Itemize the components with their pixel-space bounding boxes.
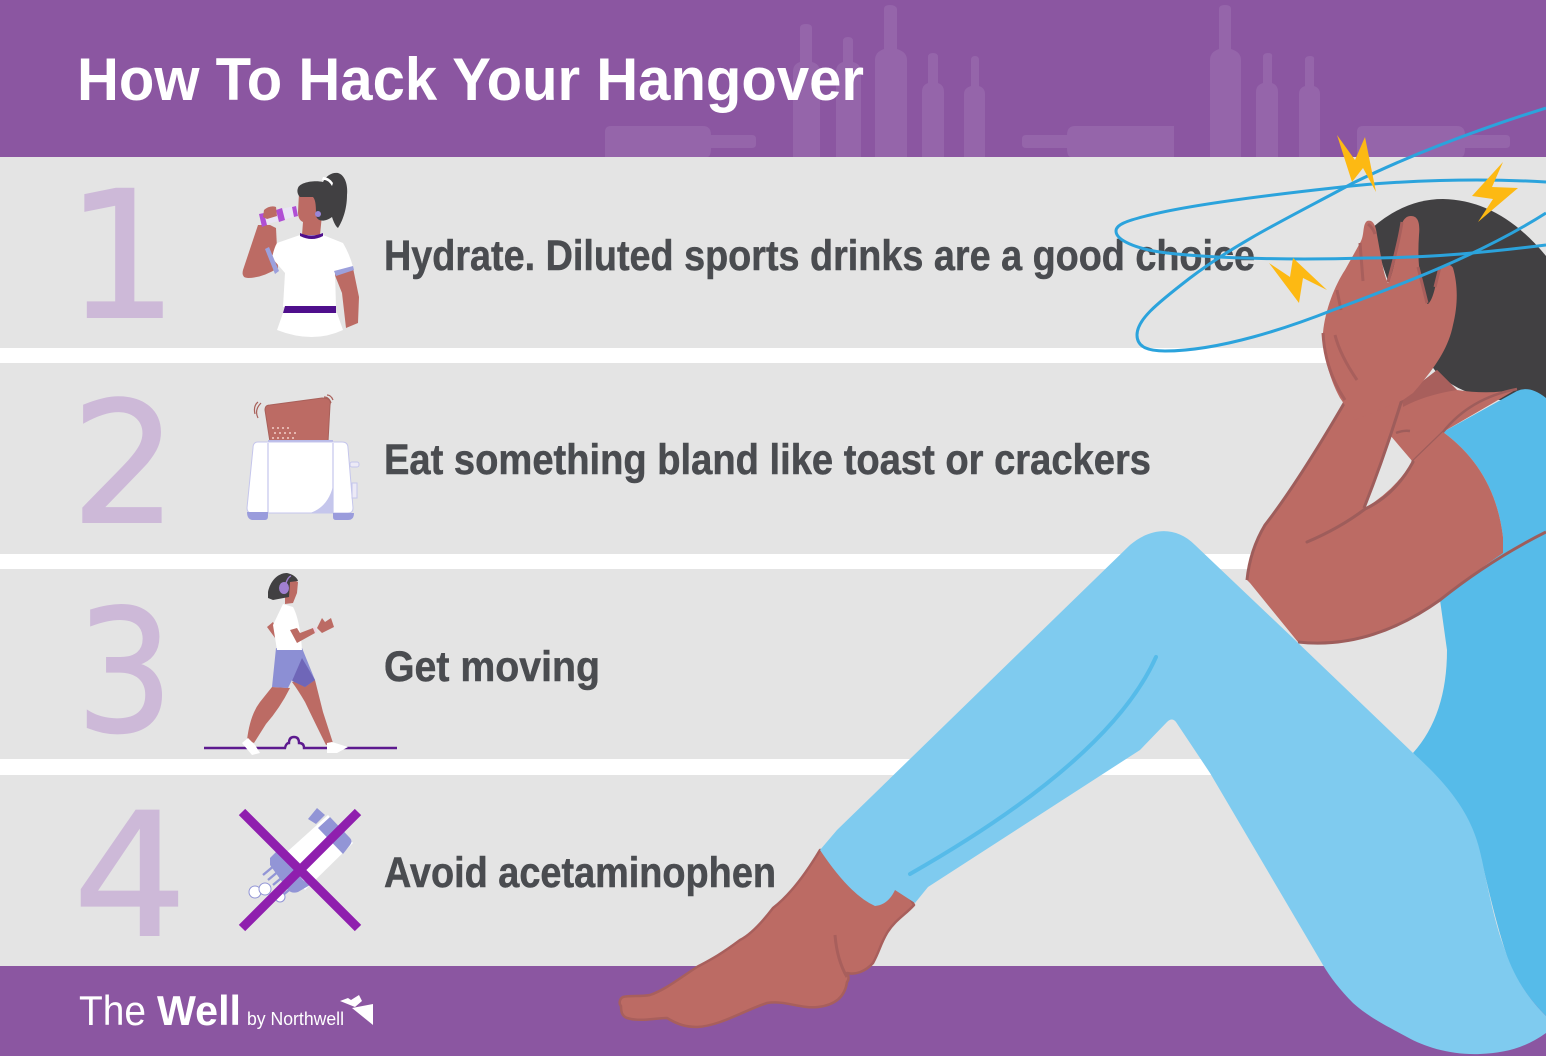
step 1 text: Hydrate. Diluted sports drinks are a good choice [384, 232, 1255, 280]
leg [820, 531, 1546, 1054]
number 3: 3 [76, 574, 173, 772]
lightning bolts [1269, 135, 1518, 303]
foot [620, 850, 914, 1027]
step 2 text: Eat something bland like toast or crackers [384, 436, 1151, 484]
step 4 text: Avoid acetaminophen [384, 849, 776, 897]
step 3 text: Get moving [384, 643, 600, 691]
number 1: 1 [66, 154, 178, 359]
hand [1323, 216, 1457, 420]
panel: footer banner [0, 966, 1546, 1056]
torso [1413, 389, 1546, 1016]
panel: step 1 band [0, 157, 1546, 348]
panel: header banner [0, 0, 1546, 157]
icon: logo bird [340, 995, 373, 1025]
logo: The Well by Northwell: by Northwell [247, 1009, 344, 1029]
hair [1372, 199, 1546, 400]
logo: The Well by Northwell: Well [157, 987, 241, 1034]
decorative bottle silhouettes [605, 5, 1510, 157]
icon: woman drinking [243, 173, 359, 337]
dizzy swirl lines [1116, 108, 1546, 351]
panel: step 4 band [0, 775, 1546, 966]
logo: The Well by Northwell: The [79, 987, 146, 1034]
icon: toaster with toast [247, 395, 359, 520]
title: How To Hack Your Hangover [77, 46, 864, 113]
panel: step 2 band [0, 363, 1546, 554]
leg crease [910, 657, 1156, 874]
neck [1390, 370, 1517, 462]
number 4: 4 [73, 777, 187, 976]
arm [1247, 388, 1503, 643]
panel: step 3 band [0, 569, 1546, 759]
illustration: seated woman holding her head [620, 199, 1546, 1054]
number 2: 2 [71, 366, 177, 562]
logo: The Well by Northwell [79, 987, 373, 1034]
icon: woman walking [204, 573, 397, 755]
icon: crossed-out pill bottle [242, 808, 358, 928]
